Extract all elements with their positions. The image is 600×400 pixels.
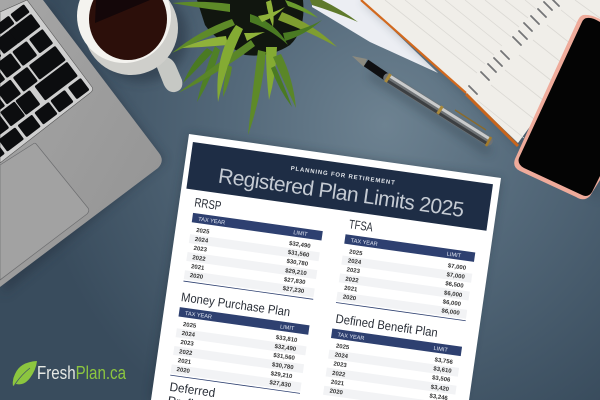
table: Defined Benefit Plan: 2020 <box>329 389 344 396</box>
table: RRSP <box>183 196 325 300</box>
table: Money Purchase Plan: $32,490 <box>274 344 297 353</box>
table: Money Purchase Plan: TAX YEAR <box>185 311 212 321</box>
plant <box>172 0 358 135</box>
subtitle: PLANNING FOR RETIREMENT <box>290 166 395 187</box>
smartphone <box>514 15 600 199</box>
table: Defined Benefit Plan: $3,610 <box>433 366 453 375</box>
table: Money Purchase Plan: $29,210 <box>270 371 293 380</box>
logo: FreshPlan.ca <box>13 361 127 386</box>
table: Defined Benefit Plan: TAX YEAR <box>337 332 365 342</box>
title: Registered Plan Limits 2025 <box>217 165 466 222</box>
table: Money Purchase Plan: 2025 <box>182 322 197 330</box>
spiral binding <box>469 0 559 94</box>
table: Money Purchase Plan: 2023 <box>180 340 195 348</box>
table: TFSA: TAX YEAR <box>350 238 378 248</box>
table: TFSA <box>336 217 478 321</box>
table: Defined Benefit Plan <box>323 312 464 400</box>
keyboard keys <box>0 4 90 190</box>
table: TFSA: $7,000 <box>447 263 467 272</box>
table: RRSP: $27,230 <box>282 286 305 295</box>
table: RRSP: $30,780 <box>286 259 309 268</box>
table: RRSP: 2021 <box>191 264 205 272</box>
table: TFSA: 2023 <box>346 267 361 275</box>
logo wordmark: FreshPlan.ca <box>37 363 127 383</box>
table: RRSP: $32,490 <box>289 241 312 250</box>
table: Defined Benefit Plan: 2024 <box>334 352 349 360</box>
pen <box>352 56 491 152</box>
table: RRSP: LIMIT <box>293 230 308 238</box>
table: Money Purchase Plan <box>170 290 312 394</box>
notebook <box>361 0 600 200</box>
table: RRSP: TAX YEAR <box>198 217 225 226</box>
table: Money Purchase Plan: $30,780 <box>271 362 294 371</box>
table: Defined Benefit Plan: 2023 <box>333 361 348 369</box>
header banner <box>186 142 493 231</box>
table: Defined Benefit Plan: 2022 <box>332 371 346 379</box>
table: TFSA: $6,500 <box>445 281 464 290</box>
table: RRSP: 2023 <box>193 246 208 254</box>
table: TFSA: $6,000 <box>441 308 461 317</box>
table: Defined Benefit Plan: $3,506 <box>432 375 451 384</box>
table: Money Purchase Plan: 2024 <box>181 331 196 339</box>
table: RRSP: 2024 <box>194 237 209 245</box>
table: Money Purchase Plan: $33,810 <box>275 335 298 344</box>
table: Defined Benefit Plan: 2025 <box>335 344 350 351</box>
table: Money Purchase Plan: $31,560 <box>273 353 296 362</box>
table: RRSP: 2020 <box>189 273 204 281</box>
table: TFSA: 2022 <box>345 277 360 285</box>
table: RRSP: $29,210 <box>285 268 308 277</box>
table: TFSA: 2020 <box>342 295 357 302</box>
table: Defined Benefit Plan: Defined Benefit Plan <box>335 312 439 340</box>
coffee mug <box>77 0 188 92</box>
laptop <box>0 0 165 295</box>
table: Defined Benefit Plan: 2021 <box>330 380 345 388</box>
table: Defined Benefit Plan: $3,420 <box>430 385 450 393</box>
table: TFSA: $6,000 <box>442 299 462 308</box>
table: RRSP: $27,830 <box>283 277 306 286</box>
table: TFSA: TFSA <box>348 217 374 234</box>
table: RRSP: $31,560 <box>287 250 310 259</box>
table: Money Purchase Plan: LIMIT <box>280 324 295 332</box>
table: TFSA: 2021 <box>344 286 358 293</box>
heading: Deferred Profit Sharing Plan: Deferred <box>169 380 216 400</box>
table: TFSA: 2025 <box>349 249 363 257</box>
table: Money Purchase Plan: Money Purchase Plan <box>180 290 291 319</box>
table: Money Purchase Plan: 2020 <box>176 367 191 375</box>
table: RRSP: RRSP <box>194 196 222 213</box>
document sheet <box>150 134 501 400</box>
table: TFSA: $7,000 <box>446 272 466 281</box>
table: Money Purchase Plan: 2022 <box>179 349 193 357</box>
notebook ruled lines <box>385 0 600 138</box>
table: TFSA: $6,000 <box>444 291 463 299</box>
table: RRSP: 2022 <box>192 255 207 263</box>
table: Defined Benefit Plan: $3,756 <box>434 357 454 366</box>
icon: leaf <box>13 361 37 386</box>
table: Money Purchase Plan: $27,830 <box>269 380 292 389</box>
table: Money Purchase Plan: 2021 <box>177 358 192 366</box>
table: TFSA: LIMIT <box>446 252 462 260</box>
table: TFSA: 2024 <box>347 258 362 266</box>
table: Defined Benefit Plan: LIMIT <box>433 346 449 354</box>
trackpad <box>0 143 89 280</box>
table: RRSP: 2025 <box>196 228 210 236</box>
white papers under notebook <box>312 0 438 73</box>
